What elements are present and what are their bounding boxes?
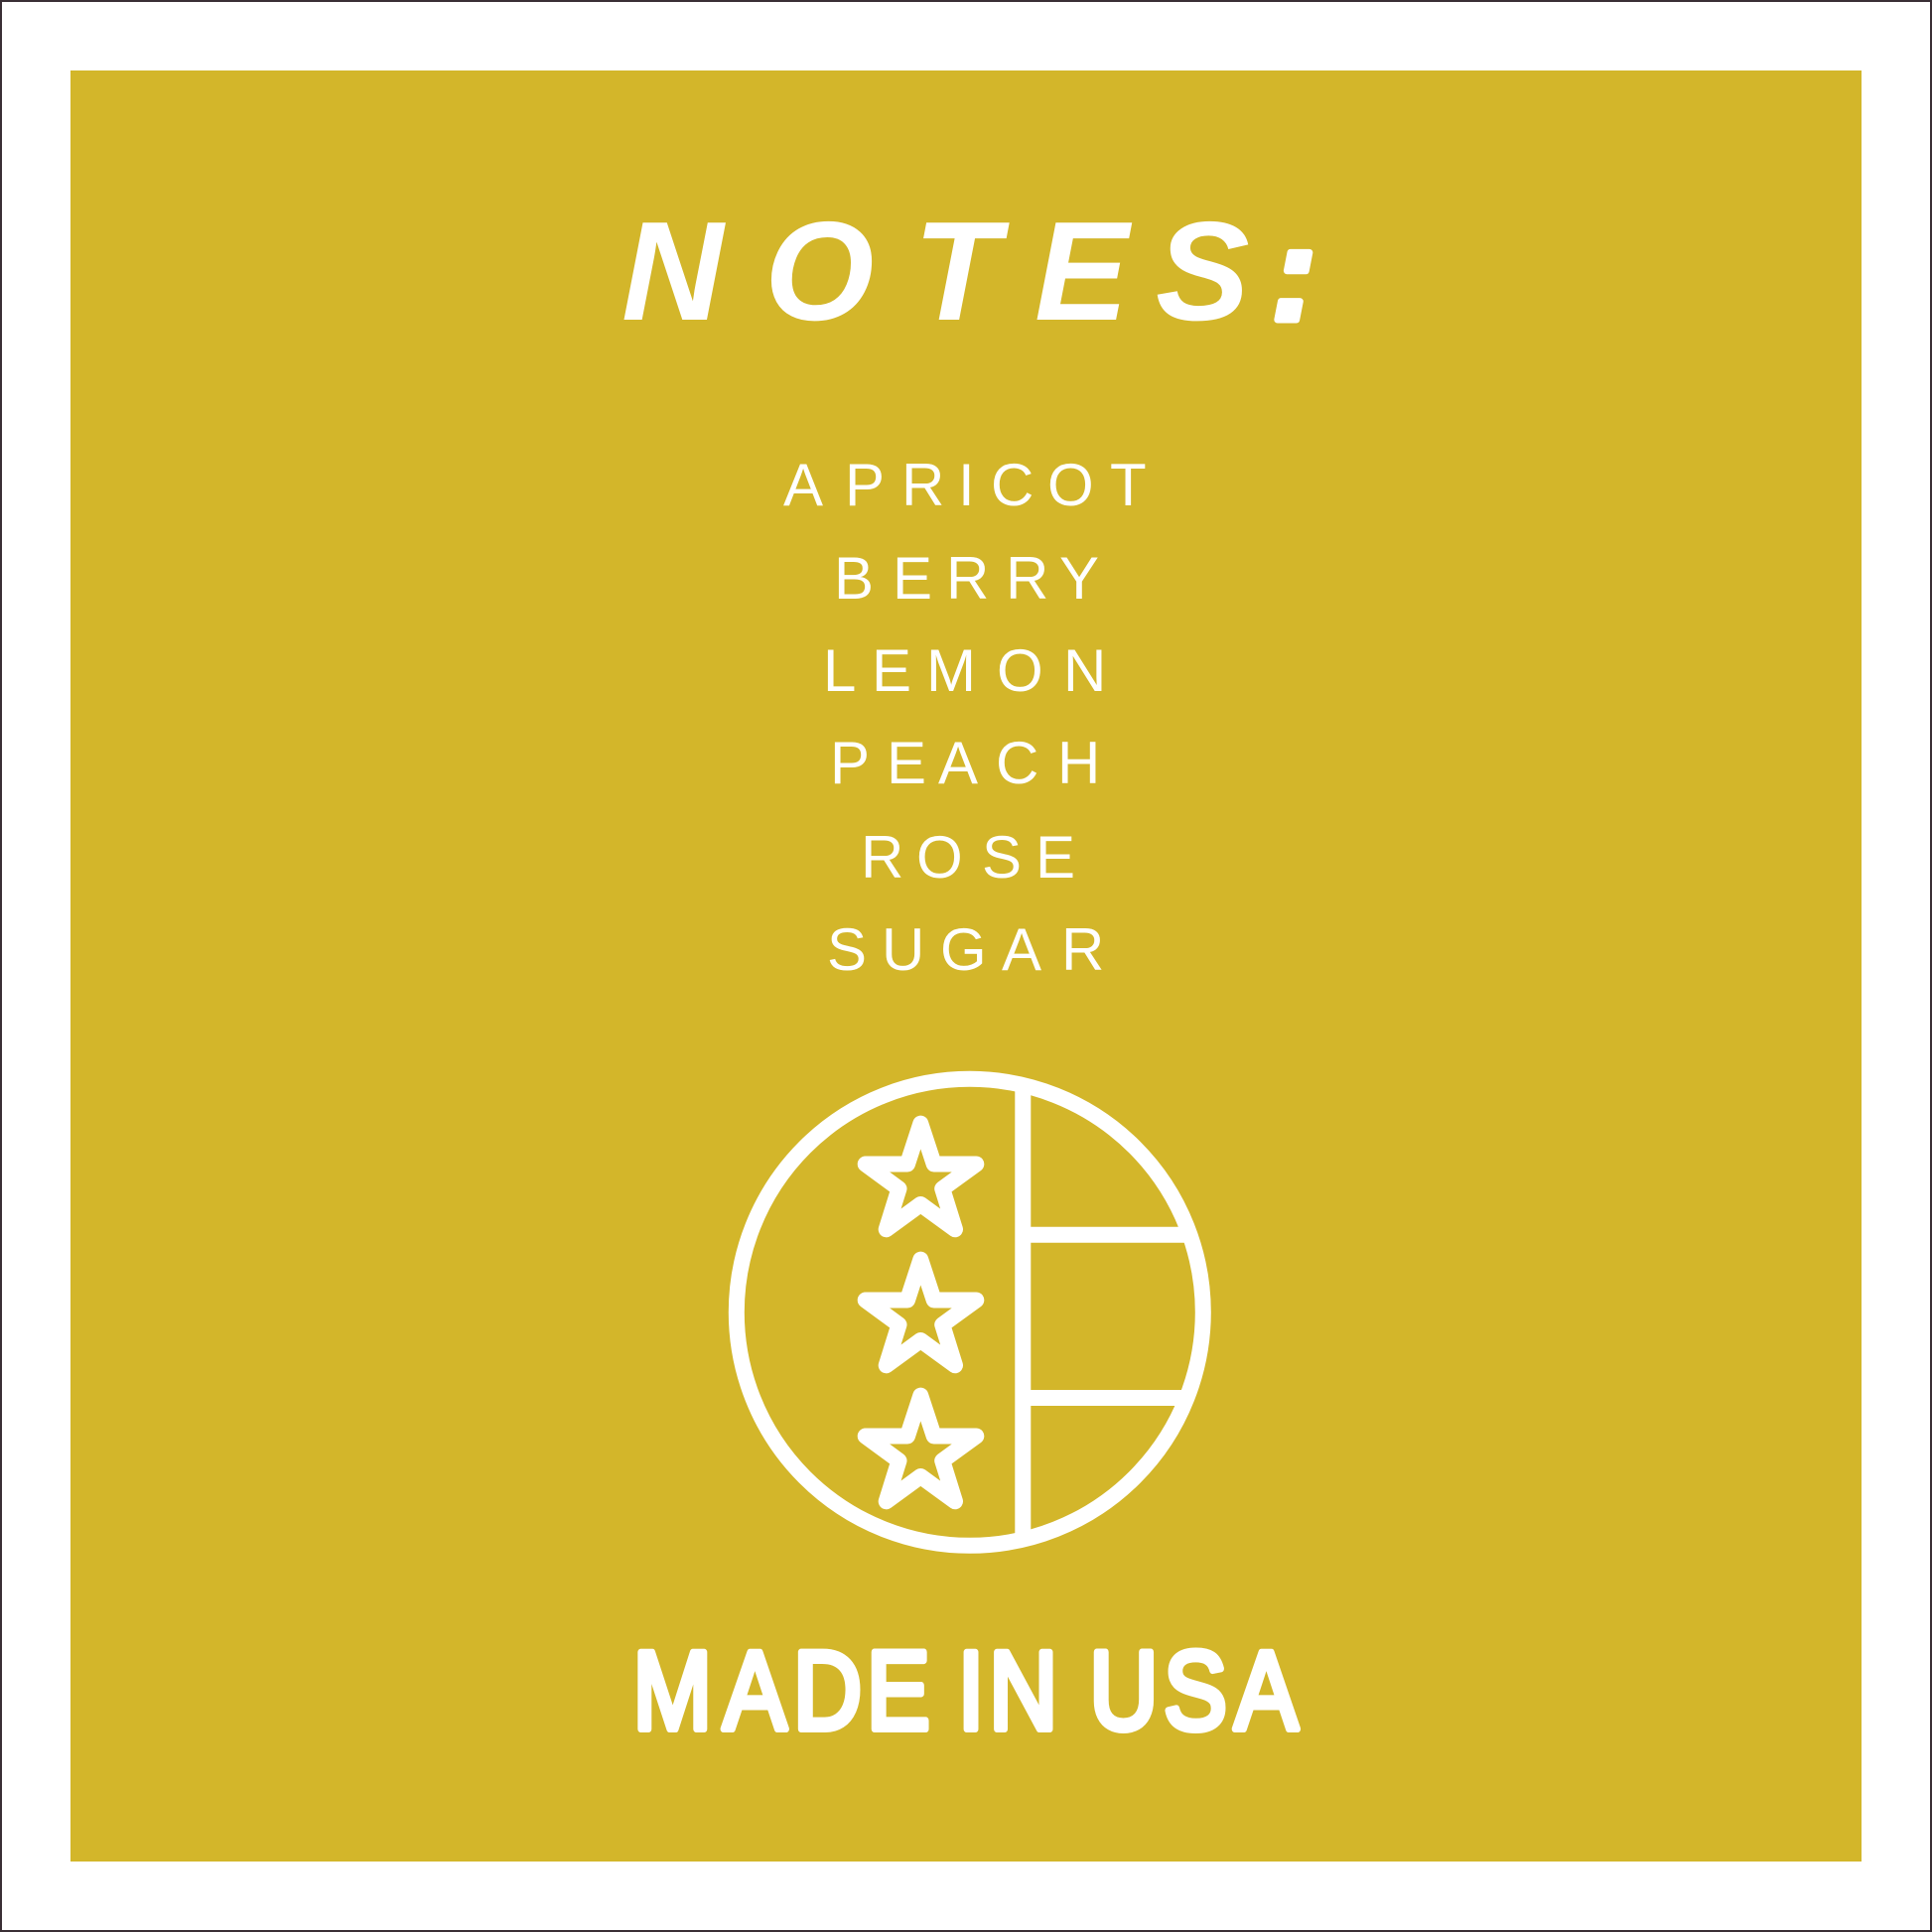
list of tasting notes — [783, 452, 1147, 983]
icon outer circle — [737, 1079, 1203, 1546]
note: lemon: LEMON — [823, 637, 1106, 704]
note: rose: ROSE — [861, 824, 1075, 891]
note: berry: BERRY — [834, 545, 1099, 612]
icon: circle with three stars and divided segments — [737, 1079, 1203, 1546]
note: peach: PEACH — [830, 730, 1100, 796]
icon: bottom star — [866, 1396, 976, 1501]
icon: top star — [866, 1124, 976, 1229]
made in usa label: MADE IN USA — [633, 1628, 1299, 1753]
icon upper horizontal divider — [1023, 1227, 1190, 1243]
note: sugar: SUGAR — [827, 916, 1104, 983]
title: NOTES: — [621, 193, 1316, 350]
icon lower horizontal divider — [1023, 1390, 1186, 1406]
note: apricot: APRICOT — [783, 452, 1147, 518]
icon: middle star — [866, 1260, 976, 1365]
icon vertical divider — [1015, 1084, 1031, 1540]
